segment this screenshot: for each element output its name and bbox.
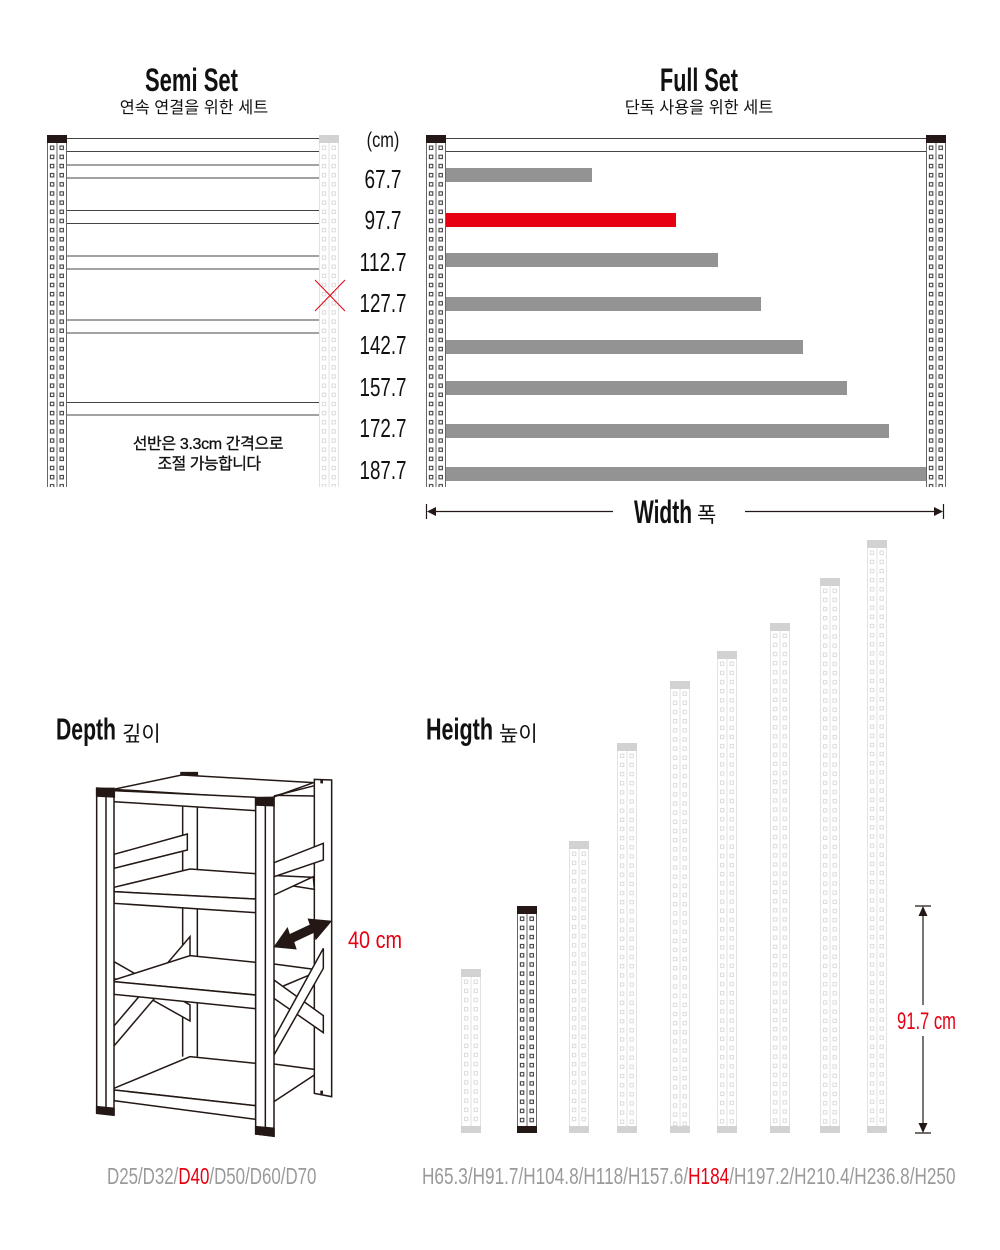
post H236.8	[867, 540, 887, 1133]
side braces middle	[114, 962, 190, 1021]
arrow: height dimension	[915, 906, 931, 1133]
panel: height posts	[461, 540, 887, 1133]
height labels in cm: 97.7	[364, 205, 402, 235]
arrow: width: 폭	[697, 504, 716, 527]
bottom shelf	[274, 1064, 314, 1102]
height labels in cm: 172.7	[360, 413, 406, 443]
height labels in cm: 187.7	[360, 455, 406, 485]
post H91.7 highlighted	[517, 906, 537, 1133]
post H104.8	[569, 841, 589, 1133]
post H210.4	[820, 578, 840, 1133]
side braces upper	[114, 834, 187, 868]
top lines	[446, 138, 926, 152]
panel: semi set shelf diagram	[47, 135, 345, 487]
depth value: 40 cm	[348, 927, 402, 954]
shelf adjust note: 선반은 3.3cm 간격으로	[133, 435, 283, 453]
right front post	[256, 798, 274, 1136]
left front post	[97, 788, 114, 1114]
height labels in cm	[360, 128, 406, 485]
depth arrow	[275, 919, 331, 949]
heading: Semi Set: Semi Set	[145, 62, 238, 98]
post H157.6	[670, 681, 690, 1133]
bar 67.7	[446, 168, 592, 182]
back post	[183, 807, 197, 1057]
rear caps	[181, 773, 197, 775]
heading: Depth: Depth	[56, 712, 116, 746]
red x mark	[315, 280, 345, 311]
heading: Height: Heigth	[426, 712, 493, 746]
post H184	[717, 651, 737, 1133]
heading: Full Set: 단독 사용을 위한 세트	[625, 99, 773, 117]
bar 127.7	[446, 297, 761, 311]
bar 142.7	[446, 340, 803, 354]
heading: Full Set	[625, 62, 773, 117]
panel: full set width bars	[426, 135, 946, 487]
illustration: shelf with depth arrow	[97, 773, 332, 1136]
bar 187.7	[446, 467, 926, 481]
height labels in cm: (cm)	[367, 128, 399, 151]
left post	[426, 135, 446, 487]
height labels in cm: 67.7	[364, 164, 402, 194]
bar 112.7	[446, 253, 718, 267]
right rear post	[314, 779, 332, 1097]
heading: Semi Set	[120, 62, 268, 117]
heading: Full Set: Full Set	[660, 62, 738, 98]
depth options: D25/D32/D40/D50/D60/D70	[107, 1165, 316, 1190]
shelf adjust note	[133, 435, 283, 473]
height options: H65.3/H91.7/H104.8/H118/H157.6/H184/H197.2/H210.4/H236.8/H250	[422, 1165, 956, 1190]
post H118	[617, 743, 637, 1133]
height labels in cm: 127.7	[360, 288, 406, 318]
left post dark	[47, 135, 67, 487]
top board	[113, 775, 313, 798]
right post light	[319, 135, 339, 487]
height labels in cm: 142.7	[360, 330, 406, 360]
bar 157.7	[446, 381, 847, 395]
bar 97.7 highlighted	[446, 213, 676, 227]
heading: Height: 높이	[499, 723, 538, 746]
third shelf	[114, 956, 256, 995]
post H197.2	[770, 623, 790, 1133]
shelf adjust note: 조절 가능합니다	[157, 455, 261, 473]
height labels in cm: 157.7	[360, 372, 406, 402]
post H65.3	[461, 969, 481, 1133]
second shelf	[114, 869, 256, 899]
right post	[926, 135, 946, 487]
heading: Semi Set: 연속 연결을 위한 세트	[120, 99, 268, 117]
arrow: width	[426, 494, 944, 530]
height labels in cm: 112.7	[360, 247, 406, 277]
arrow: width: Width	[634, 494, 692, 530]
top front band	[113, 791, 256, 811]
heading: Depth: 깊이	[122, 723, 161, 746]
height value: 91.7 cm	[897, 1008, 956, 1035]
shelf lines	[67, 138, 319, 415]
bar 172.7	[446, 424, 889, 438]
